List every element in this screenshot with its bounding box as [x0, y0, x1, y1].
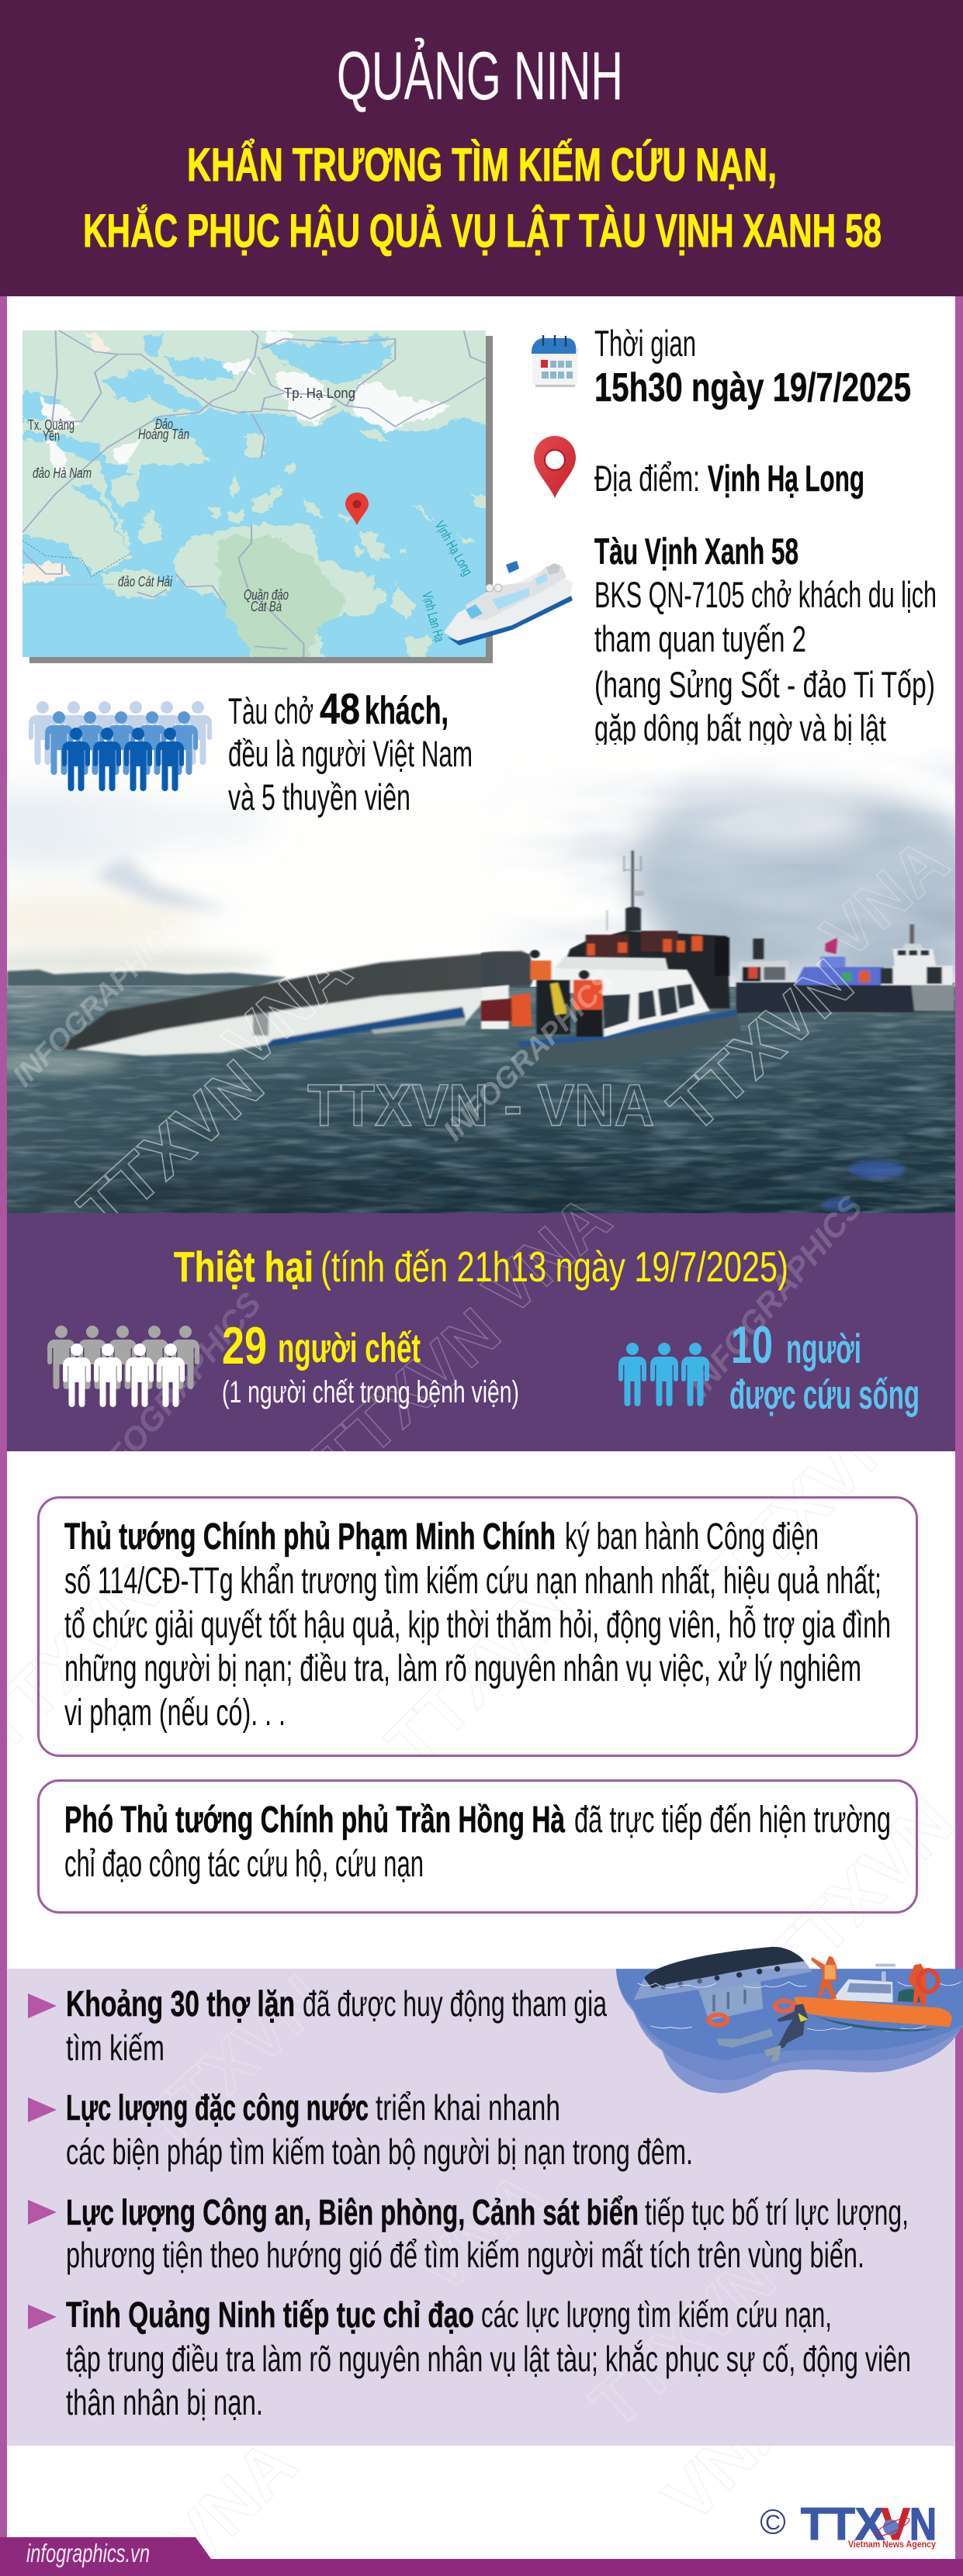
heading: damage: [174, 1243, 788, 1291]
panel watermarks: TTXVN: [127, 1961, 339, 2163]
icon: victims: [47, 1326, 199, 1407]
card: prime minister: ký ban hành Công điện: [565, 1516, 819, 1558]
stat: deaths: (1 người chết trong bệnh viện): [222, 1375, 519, 1409]
photo watermarks: VNA: [210, 932, 365, 1082]
block: location: Địa điểm:: [594, 458, 700, 499]
stat: survivors: người: [786, 1326, 861, 1372]
card: deputy prime minister: chỉ đạo công tác cứu hộ, cứu nạn: [64, 1844, 424, 1885]
bullet 4: [28, 2294, 911, 2422]
website label: infographics.vn: [26, 2539, 150, 2567]
crew: [811, 1956, 837, 1999]
panel watermarks: TTXVN: [302, 1294, 514, 1495]
diver: [778, 2004, 809, 2048]
map labels: Quần đảo: [244, 587, 289, 603]
large rescue ship (rear): [481, 851, 730, 1029]
map labels: Tp. Hạ Long: [284, 386, 355, 401]
panel: people on board: [29, 684, 473, 818]
logo: TTXVN: C: [765, 2511, 781, 2534]
icon: calendar: [532, 335, 578, 387]
stat: deaths: 29: [222, 1316, 267, 1375]
heading: damage: (tính đến 21h13 ngày 19/7/2025): [320, 1243, 788, 1291]
block: time: [532, 323, 911, 410]
map labels: Cát Bà: [251, 599, 282, 614]
footer band: [0, 2537, 963, 2576]
rescue boat: [809, 2014, 937, 2031]
white rescue boat with crew: [511, 950, 743, 1067]
map labels: đảo Cát Hải: [118, 574, 173, 590]
block: ship details: tham quan tuyến 2: [594, 618, 806, 659]
card: prime minister: vi phạm (nếu có). . .: [64, 1693, 286, 1734]
bullet 1: đã được huy động tham gia: [303, 1983, 607, 2024]
logo: TTXVN: [761, 2499, 937, 2550]
map labels: Vịnh Hạ Long: [432, 518, 476, 579]
panel watermarks: [127, 1961, 789, 2442]
illustration: divers and rescue boat: [616, 1947, 963, 2093]
bullet 3: [28, 2192, 909, 2275]
bullet 2: Lực lượng đặc công nước: [66, 2087, 369, 2128]
capsized hull: [57, 951, 534, 1056]
panel watermarks: TTXVN: [577, 2240, 789, 2442]
photo watermarks: [7, 824, 962, 1247]
distant patrol ships: [736, 925, 954, 1014]
panel: people on board: Tàu chở: [228, 690, 313, 731]
block: ship details: Tàu Vịnh Xanh 58: [594, 531, 798, 572]
map labels: đảo Hà Nam: [33, 465, 92, 481]
headline: [83, 139, 882, 257]
faint page watermarks: TTXVN: [372, 1566, 588, 1782]
panel: damage: [7, 1181, 955, 1500]
lifebuoys: [708, 2000, 794, 2025]
photo watermarks: TTXVN: [655, 945, 867, 1146]
bullet 4: Tỉnh Quảng Ninh tiếp tục chỉ đạo: [66, 2294, 474, 2335]
panel: rescue forces: [7, 1961, 955, 2446]
panel: people on board: khách,: [365, 689, 449, 732]
photo watermarks: TTXVN: [65, 1046, 277, 1247]
stat: survivors: 10: [731, 1316, 773, 1374]
card: deputy prime minister: [39, 1781, 917, 1913]
roads: [23, 330, 486, 657]
icon: crowd of passengers: [29, 701, 212, 791]
bullet 2: các biện pháp tìm kiếm toàn bộ người bị nạn trong đêm.: [66, 2132, 693, 2172]
sea: [0, 987, 955, 1218]
distant islands: [7, 970, 287, 987]
bullet 1: [28, 1983, 607, 2068]
bullet 2: triển khai nhanh: [376, 2087, 560, 2128]
icon: location pin: [534, 436, 576, 498]
block: time: Thời gian: [594, 323, 696, 364]
darker Cát Bà highlands: [217, 535, 343, 667]
panel: people on board: và 5 thuyền viên: [228, 776, 410, 818]
bullet 3: Lực lượng Công an, Biên phòng, Cảnh sát biển: [66, 2192, 639, 2232]
logo: TTXVN: N: [909, 2499, 937, 2550]
heading: damage: Thiệt hại: [174, 1243, 313, 1291]
icon: cruise ship: [444, 561, 573, 645]
sunken hull: [634, 1961, 812, 2021]
icon: survivors: [618, 1343, 709, 1406]
bullet 4: thân nhân bị nạn.: [66, 2382, 263, 2422]
photo watermarks: INFOGRAPHICS: [7, 911, 189, 1093]
bullet 1: tìm kiếm: [66, 2028, 165, 2068]
stat: deaths: người chết: [278, 1326, 421, 1371]
islands: [104, 427, 490, 667]
map labels: Tx. Quảng: [28, 417, 74, 433]
header band: [0, 0, 963, 296]
block: location: Vịnh Hạ Long: [708, 458, 864, 499]
panel watermarks: VNA: [404, 2158, 559, 2308]
inland water: [23, 334, 395, 556]
map labels: Yên: [43, 428, 60, 444]
panel watermarks: [79, 1181, 869, 1500]
white urban areas: [23, 331, 454, 584]
stat: deaths: [222, 1316, 519, 1409]
card: prime minister: [39, 1497, 917, 1756]
faint page watermarks: VNA: [649, 2378, 808, 2537]
faint page watermarks: [0, 1395, 963, 2576]
panel: people on board: đều là người Việt Nam: [228, 733, 473, 774]
northern and western land: [23, 330, 486, 576]
panel watermarks: VNA: [470, 1181, 625, 1330]
map labels: Hoàng Tân: [138, 427, 189, 442]
map labels: Vịnh Lan Hạ: [419, 590, 448, 644]
card: prime minister: Thủ tướng Chính phủ Phạm Minh Chính: [64, 1516, 556, 1558]
sky: [0, 729, 963, 993]
panel: people on board: 48: [320, 684, 360, 733]
map labels: [28, 386, 476, 644]
stat: survivors: [729, 1316, 920, 1418]
photo: capsized boat and rescue vessels: [7, 745, 955, 1213]
logo: TTXVN: V: [881, 2499, 910, 2550]
map labels: Đảo: [155, 417, 173, 432]
bullet 1: Khoảng 30 thợ lặn: [66, 1983, 295, 2024]
bullet 2: [28, 2087, 693, 2172]
photo watermarks: INFOGRAPHICS: [438, 965, 620, 1147]
block: location: [534, 436, 864, 499]
photo watermarks: VNA: [808, 824, 962, 973]
card: deputy prime minister: Phó Thủ tướng Chính phủ Trần Hồng Hà: [64, 1800, 565, 1841]
panel watermarks: INFOGRAPHICS: [79, 1285, 268, 1500]
photo watermarks: TTXVN - VNA: [307, 1073, 654, 1139]
logo: TTXVN: TTX: [801, 2499, 885, 2550]
map panel: [23, 330, 493, 663]
faint page watermarks: TTXVN: [752, 1783, 963, 2000]
title: Quảng Ninh: QUẢNG NINH: [337, 37, 623, 114]
logo: TTXVN: Vietnam News Agency: [848, 2539, 936, 2550]
panel watermarks: INFOGRAPHICS: [681, 1188, 869, 1403]
block: ship details: [594, 531, 937, 749]
faint page watermarks: TTXVN: [698, 1395, 914, 1612]
icon: map marker: [345, 493, 369, 525]
